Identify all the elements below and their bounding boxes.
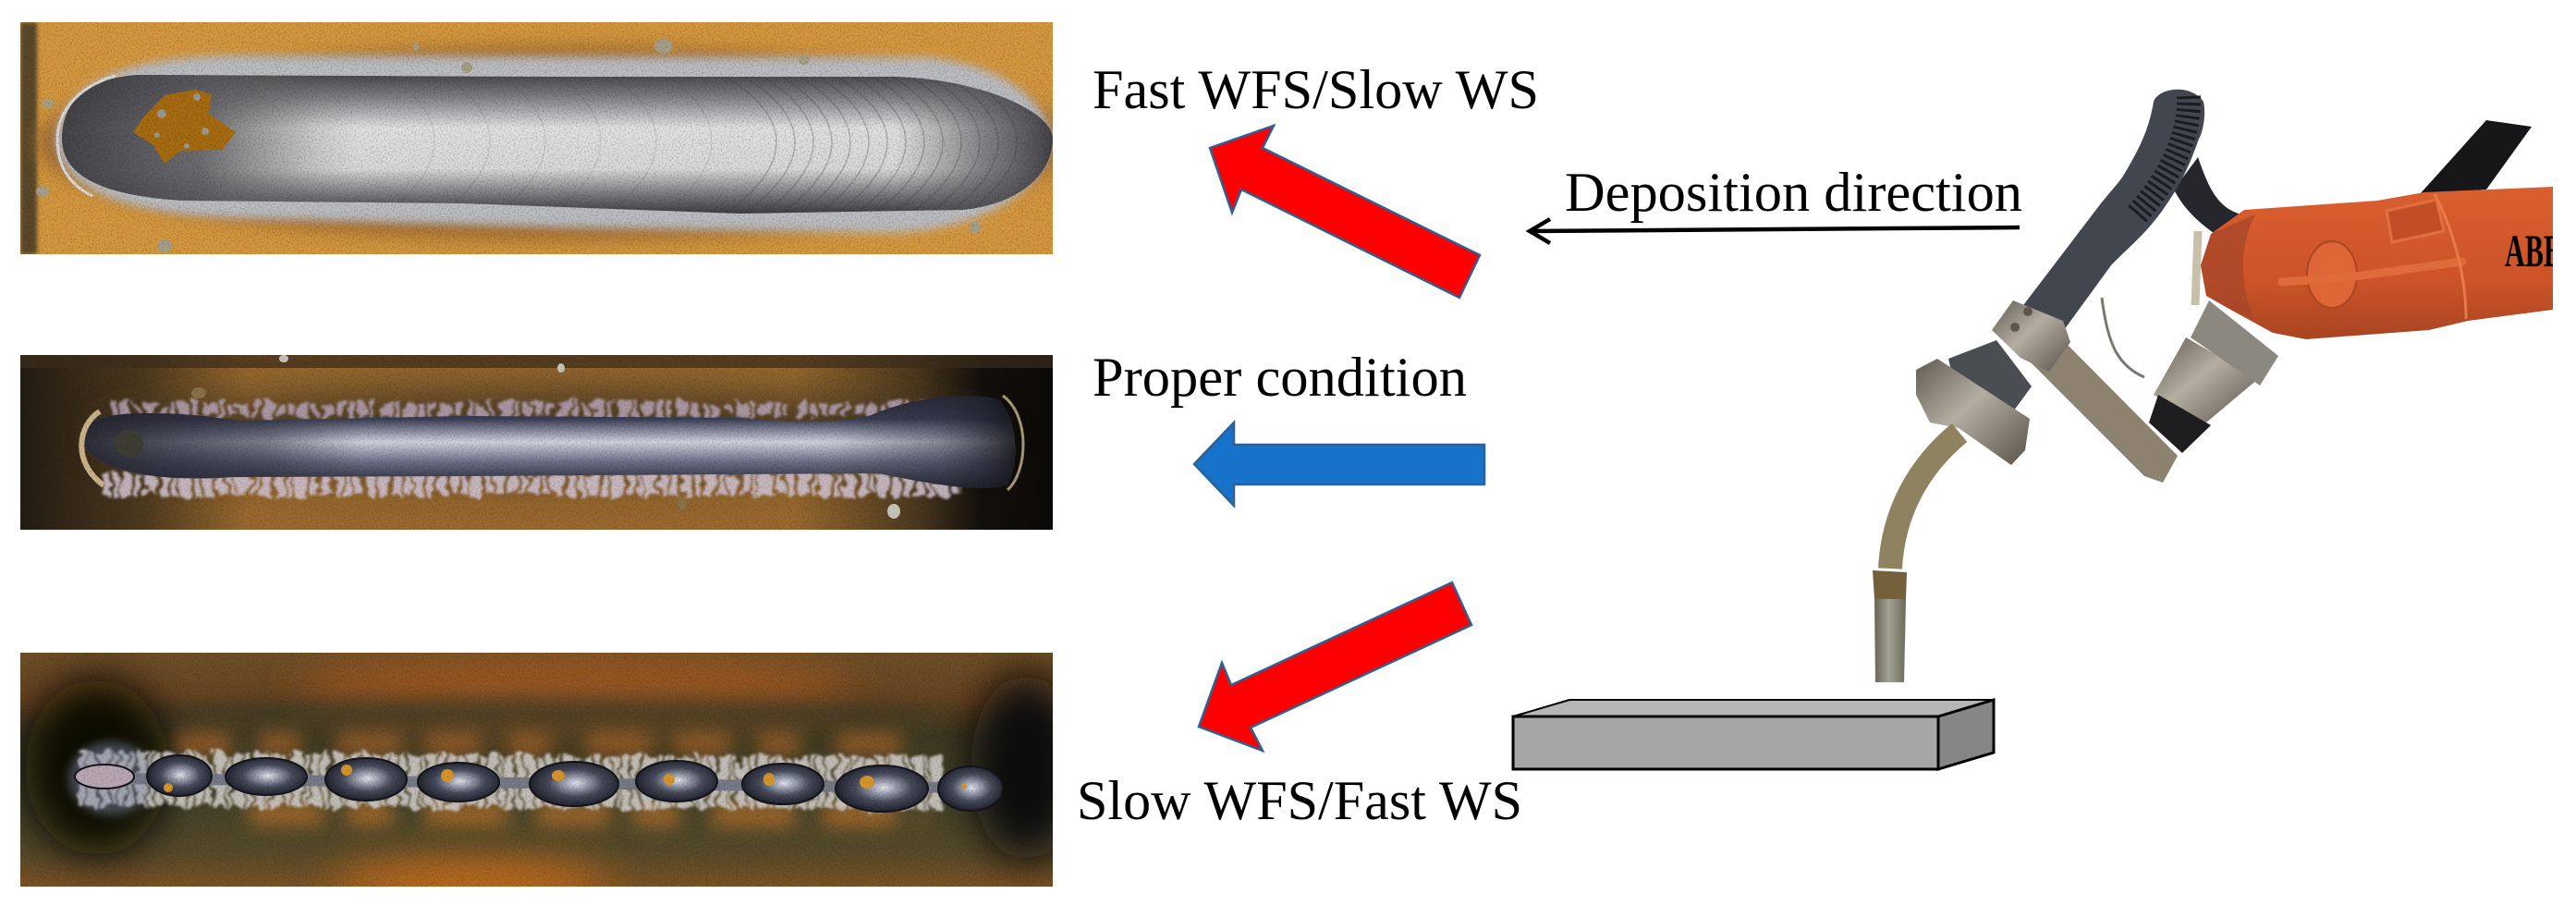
label: Slow WFS/Fast WS: Slow WFS/Fast WS: [1077, 770, 1522, 831]
solidification ripples: [388, 74, 1017, 217]
photo panel: wide weld bead (fast WFS / slow WS): [20, 22, 1072, 254]
black cable top right: [2420, 120, 2532, 194]
thin cable: [2102, 298, 2144, 377]
dark torch neck block: [1948, 340, 2032, 414]
hose ribbing: [2137, 96, 2189, 214]
swan-neck tube: [1890, 433, 1959, 569]
top face: [1513, 700, 1994, 716]
hump 7: [636, 761, 717, 802]
surface grain: [20, 22, 1053, 254]
black rubber boot: [2149, 395, 2211, 453]
robot arm with welding torch: [1873, 90, 2562, 682]
black scorch left: [25, 680, 169, 855]
label: Deposition direction: Deposition direction: [1565, 162, 2022, 223]
lower oxide: [250, 814, 924, 815]
coupling cylinder: [2154, 337, 2258, 422]
white spatter band: [79, 778, 943, 784]
steel plate background: [20, 653, 1053, 887]
photo panel: proper weld bead: [20, 355, 1053, 530]
label: Proper condition: Proper condition: [1093, 347, 1467, 408]
orange cap plate: [2307, 241, 2357, 308]
front face: [1513, 716, 1938, 769]
orange collar shading: [2201, 214, 2255, 319]
arrow: blue to proper bead: [1194, 422, 1484, 506]
burnt left edge of plate: [20, 22, 37, 254]
upper spatter fringe: [111, 401, 924, 418]
row of bead humps: [75, 755, 1003, 812]
weld bead body: [82, 396, 1015, 488]
photo panel: humped weld bead (slow WFS / fast WS): [20, 653, 1081, 905]
lower spatter fringe: [102, 473, 961, 496]
clamp bolts: [2010, 307, 2033, 332]
orange robot body: [2201, 187, 2553, 339]
upper clamp: [1992, 300, 2070, 372]
hump 9: [836, 765, 928, 812]
steel plate background: [20, 355, 1053, 530]
hump 4: [325, 758, 407, 801]
olive tint upper band: [111, 697, 961, 730]
nozzle tip: [1874, 599, 1906, 682]
hump 10: [938, 766, 1003, 811]
spatter dots: [36, 39, 981, 252]
lower clamp: [1916, 359, 2030, 465]
bead shading at both ends: [82, 396, 1015, 488]
arrow: red up-left to fast WFS bead: [1210, 126, 1480, 298]
central thin bead line: [106, 778, 961, 788]
hump 8: [742, 764, 824, 804]
left edge bright rim: [57, 76, 116, 196]
hump 2: [147, 755, 212, 796]
slag pores: [154, 93, 209, 149]
main hose: [2015, 90, 2204, 340]
arrow: red down-left to slow WFS bead: [1199, 582, 1471, 751]
steel plate background: [20, 22, 1053, 254]
hump 1: [75, 765, 134, 789]
coupling ring: [2191, 300, 2278, 386]
bead start crater: [116, 430, 143, 458]
body seam: [2435, 194, 2466, 319]
hump 6: [530, 762, 618, 806]
start spatter blue zone: [68, 741, 153, 815]
substrate block: [1513, 700, 1994, 769]
crater rim left: [81, 411, 104, 485]
scorch halo around bead: [37, 47, 1072, 239]
cream strap: [2195, 231, 2198, 305]
secondary hose: [2174, 157, 2241, 233]
surface grain: [20, 653, 1053, 887]
black scorch right: [971, 675, 1081, 860]
bracket bar: [2024, 344, 2178, 483]
orange heat tint upper: [296, 654, 850, 724]
oxide zone around bead: [55, 55, 1053, 233]
crater rim right: [1003, 396, 1023, 490]
darker band along plate top: [20, 355, 1053, 368]
spatter dots: [191, 355, 900, 519]
nozzle collar: [1873, 570, 1907, 599]
side face: [1938, 700, 1994, 769]
hump 5: [418, 763, 499, 802]
weld bead body: [62, 75, 1053, 214]
orange lever: [2282, 262, 2462, 282]
bead shading at both ends: [62, 75, 1053, 214]
arrow: deposition direction: [1530, 219, 2020, 243]
orange heat tint lower: [333, 861, 610, 905]
hump 3: [226, 758, 307, 795]
slag island: [133, 90, 236, 164]
surface grain: [20, 355, 1053, 530]
label: Fast WFS/Slow WS: Fast WFS/Slow WS: [1093, 59, 1539, 120]
scorched zone near bead: [92, 392, 998, 477]
orange bracket: [2387, 200, 2444, 242]
orange-brown oxide above and below: [176, 733, 924, 753]
orange slag spots: [164, 765, 967, 792]
